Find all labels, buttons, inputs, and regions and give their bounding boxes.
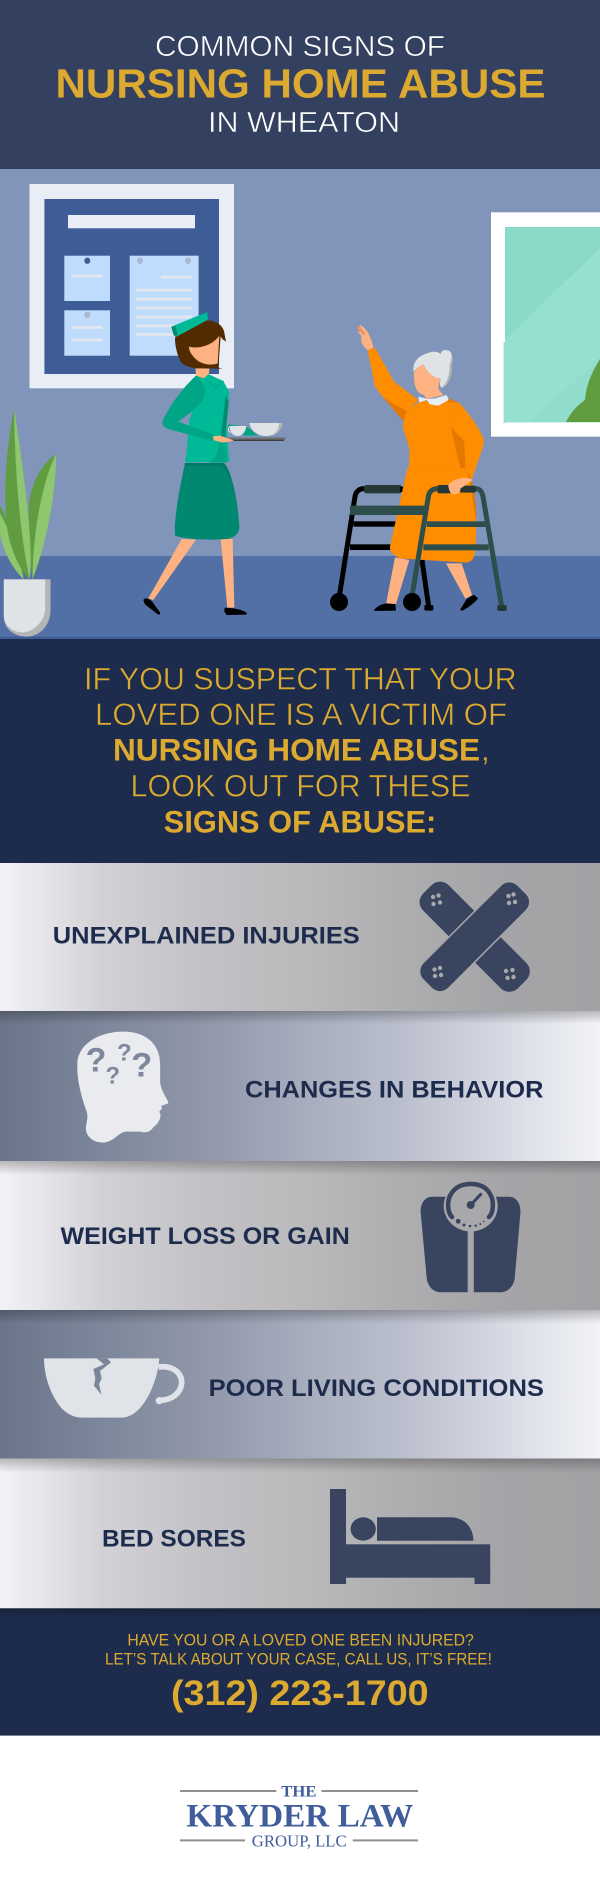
panel: call to action footer (0, 1608, 600, 1736)
illustration: window (491, 212, 600, 437)
illustration: notice board (30, 184, 234, 388)
title line 1: COMMON SIGNS OF (155, 31, 445, 63)
panel: bed sores (0, 1458, 600, 1608)
icon: head with question marks (77, 1032, 168, 1143)
icon: head with question marks: ? (105, 1062, 120, 1089)
panel: illustration scene (0, 169, 600, 639)
title line 2: NURSING HOME ABUSE (56, 60, 546, 106)
panel: weight loss or gain (0, 1161, 600, 1310)
intro line 3: NURSING HOME ABUSE (113, 732, 480, 768)
icon: head with question marks: ? (117, 1040, 132, 1067)
label: bed sores: BED SORES (102, 1526, 246, 1553)
label: unexplained injuries: UNEXPLAINED INJURIES (53, 922, 360, 950)
panel: intro statement (0, 639, 600, 863)
panel: law firm logo (0, 1736, 600, 1895)
panel: poor living conditions (0, 1310, 600, 1458)
walker rear frame (330, 485, 433, 611)
logo text: group llc: GROUP, LLC (252, 1832, 347, 1851)
intro line 2: LOVED ONE IS A VICTIM OF (95, 696, 507, 732)
call to action line 1: HAVE YOU OR A LOVED ONE BEEN INJURED? (127, 1632, 474, 1650)
phone number: (312) 223-1700 (171, 1674, 429, 1713)
icon: head with question marks: ? (131, 1047, 152, 1085)
logo text: kryder law: KRYDER LAW (186, 1799, 413, 1835)
call to action line 2: LET’S TALK ABOUT YOUR CASE, CALL US, IT’S FREE! (105, 1651, 492, 1669)
label: changes in behavior: CHANGES IN BEHAVIOR (245, 1077, 543, 1104)
panel: unexplained injuries (0, 863, 600, 1011)
intro line 5: SIGNS OF ABUSE: (164, 804, 436, 840)
label: poor living conditions: POOR LIVING CONDITIONS (209, 1375, 544, 1402)
icon: head with question marks: ? (86, 1042, 106, 1080)
logo text: the: THE (281, 1784, 316, 1801)
panel: changes in behavior (0, 1011, 600, 1161)
icon: person in bed (330, 1489, 490, 1584)
icon: weighing scale (421, 1180, 520, 1293)
icon: broken cup (44, 1358, 182, 1418)
label: weight loss or gain: WEIGHT LOSS OR GAIN (60, 1223, 350, 1250)
illustration: potted plant (0, 408, 56, 637)
panel: header (0, 0, 600, 169)
intro line 1: IF YOU SUSPECT THAT YOUR (84, 660, 517, 696)
title line 3: IN WHEATON (208, 107, 400, 139)
walker front frame (403, 485, 507, 611)
intro line 4: LOOK OUT FOR THESE (130, 768, 470, 804)
icon: crossed bandages (415, 877, 535, 997)
illustration: elderly woman with walker (330, 325, 507, 611)
intro line 3 comma: , (481, 732, 490, 768)
illustration: nurse carrying tray (143, 312, 286, 615)
